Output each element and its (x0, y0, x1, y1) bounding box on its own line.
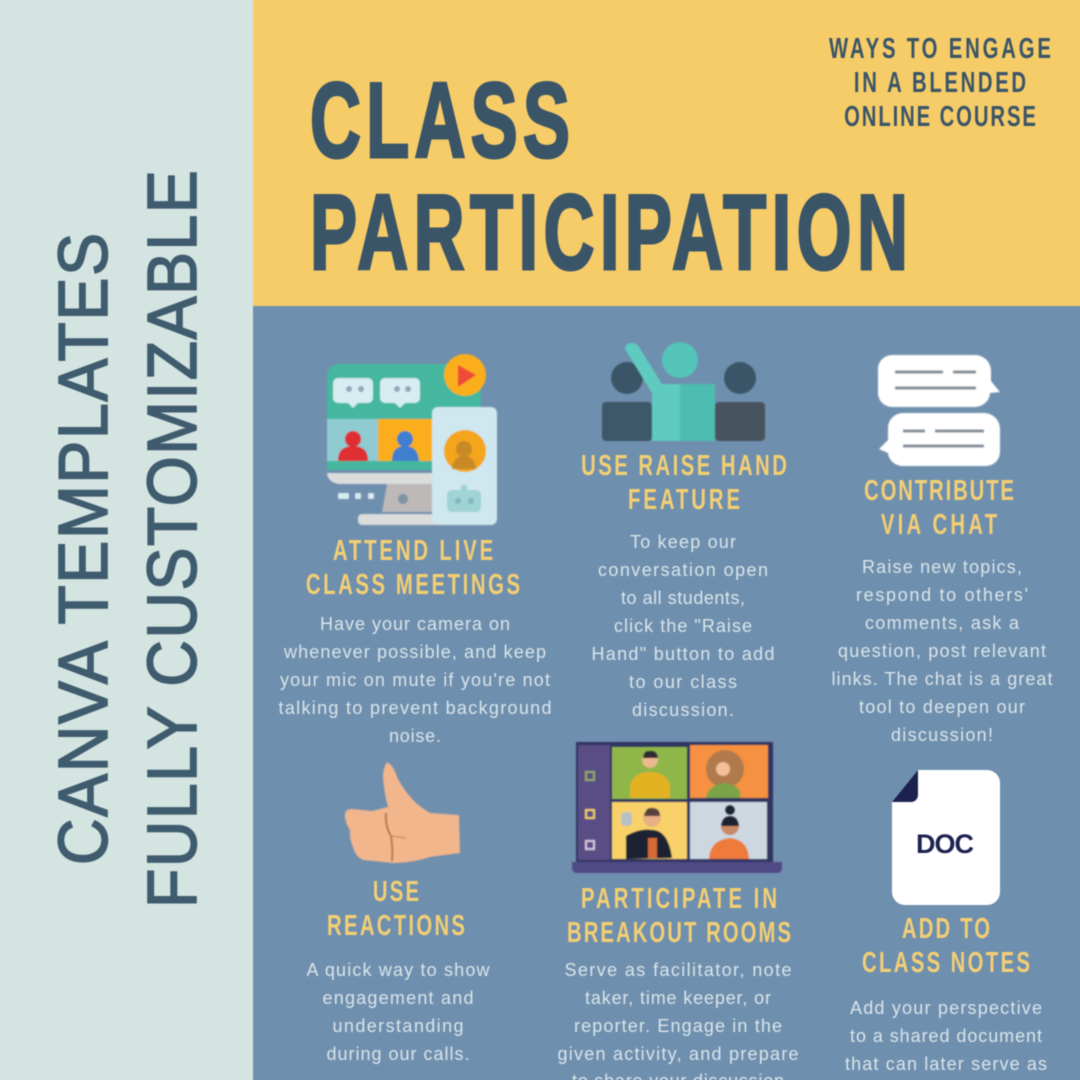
body text: discussion! (891, 725, 993, 745)
body text: A quick way to show (306, 960, 490, 980)
heading (327, 876, 465, 942)
panel: main blue background (253, 306, 1080, 1080)
icon: thumbs up hand (345, 762, 460, 863)
subtitle (829, 33, 1051, 133)
title: CLASS (310, 61, 570, 181)
body text: reporter. Engage in the (574, 1016, 782, 1036)
body text (278, 614, 552, 746)
body text: whenever possible, and keep (283, 642, 546, 662)
body text (592, 532, 774, 720)
sidebar text: canva templates: CANVA TEMPLATES (45, 233, 123, 865)
body text: noise. (389, 726, 441, 746)
body text: To keep our (630, 532, 736, 552)
subtitle: WAYS TO ENGAGE (829, 33, 1051, 65)
heading: REACTIONS (327, 910, 465, 942)
body text (832, 557, 1052, 745)
icon: laptop breakout video grid (572, 742, 782, 873)
body text: click the "Raise (614, 616, 752, 636)
body text: to a shared document (850, 1026, 1042, 1046)
heading (567, 883, 791, 949)
card: contribute via chat (832, 475, 1052, 745)
card: participate in breakout rooms (558, 883, 798, 1080)
body text: to all students, (621, 588, 745, 608)
body text: given activity, and prepare (558, 1044, 798, 1064)
icon: chat bubbles (878, 355, 1000, 466)
subtitle: IN A BLENDED (854, 67, 1026, 99)
heading: ADD TO (902, 913, 990, 945)
body text (558, 960, 798, 1080)
body text: to our class (629, 672, 737, 692)
subtitle: ONLINE COURSE (844, 101, 1036, 133)
body text: Hand" button to add (592, 644, 774, 664)
card: add to class notes (845, 913, 1047, 1074)
heading: BREAKOUT ROOMS (567, 917, 791, 949)
heading: USE RAISE HAND (581, 450, 787, 482)
body text: understanding (332, 1016, 464, 1036)
body text: taker, time keeper, or (585, 988, 771, 1008)
heading (862, 913, 1030, 979)
panel: yellow header (253, 0, 1080, 306)
heading (864, 475, 1014, 541)
body text: Have your camera on (320, 614, 510, 634)
card: use raise hand feature (581, 450, 787, 720)
card: attend live class meetings (278, 535, 552, 746)
heading (581, 450, 787, 516)
heading: PARTICIPATE IN (581, 883, 777, 915)
title (310, 61, 908, 293)
body text: tool to deepen our (859, 697, 1025, 717)
body text: respond to others' (856, 585, 1028, 605)
body text: links. The chat is a great (832, 669, 1052, 689)
icon: raised hand group (602, 342, 765, 441)
heading: CLASS MEETINGS (306, 569, 520, 601)
body text: question, post relevant (838, 641, 1046, 661)
heading: USE (373, 876, 419, 908)
body text: discussion. (632, 700, 734, 720)
body text: Raise new topics, (862, 557, 1022, 577)
heading: VIA CHAT (881, 509, 998, 541)
body text: during our calls. (326, 1044, 470, 1064)
body text: Serve as facilitator, note (564, 960, 792, 980)
icon: video meeting monitor and phone (327, 354, 497, 525)
body text: your mic on mute if you're not (280, 670, 550, 690)
body text: comments, ask a (865, 613, 1020, 633)
heading: ATTEND LIVE (333, 535, 493, 567)
body text: that can later serve as (845, 1054, 1047, 1074)
icon: DOC file (892, 770, 1000, 905)
body text (306, 960, 490, 1064)
body text: Add your perspective (850, 998, 1042, 1018)
title: PARTICIPATION (310, 173, 908, 293)
icon label: DOC (916, 829, 974, 859)
body text: talking to prevent background (278, 698, 552, 718)
body text (845, 998, 1047, 1074)
sidebar text: fully customizable: FULLY CUSTOMIZABLE (134, 170, 212, 908)
body text: conversation open (598, 560, 768, 580)
heading: CLASS NOTES (862, 947, 1030, 979)
body text: engagement and (322, 988, 474, 1008)
panel: left sidebar (0, 0, 253, 1080)
heading: CONTRIBUTE (864, 475, 1014, 507)
heading (306, 535, 520, 601)
heading: FEATURE (628, 484, 740, 516)
card: use reactions (306, 876, 490, 1064)
